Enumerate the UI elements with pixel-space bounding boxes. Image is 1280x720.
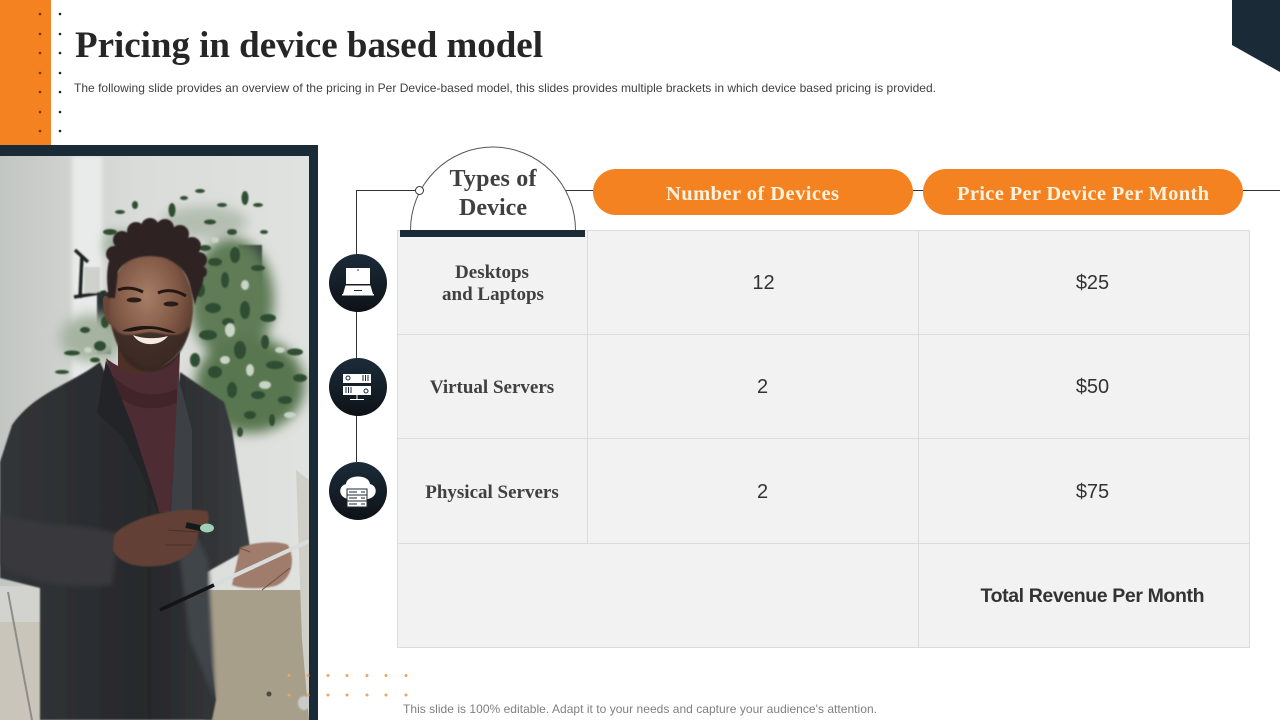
- row: desktops and laptops: 12: [752, 272, 775, 294]
- row: physical servers: [425, 481, 1109, 503]
- header pill: price per device per month: Price Per Device Per Month: [957, 183, 1210, 205]
- row: desktops and laptops: $25: [1076, 272, 1109, 294]
- turtleneck: [106, 352, 180, 512]
- total revenue label: Total Revenue Per Month: [980, 585, 1204, 607]
- plant foliage: [60, 206, 305, 433]
- subtitle description: The following slide provides an overview of the pricing in Per Device-based model, this slides provides multiple brackets in which device based pricing is provided.: [74, 81, 936, 95]
- hair: [106, 218, 207, 305]
- row: physical servers: Physical Servers: [425, 482, 559, 503]
- plant bracket and pot: [74, 245, 262, 354]
- table: [397, 230, 1250, 648]
- title: Pricing in device based model: [75, 25, 543, 66]
- icon: virtual servers: [329, 358, 387, 416]
- footer note: This slide is 100% editable. Adapt it to your needs and capture your audience's attention.: [403, 702, 877, 716]
- row: desktops and laptops: and Laptops: [442, 284, 544, 305]
- header: types of device: Device: [459, 195, 527, 221]
- row: desktops and laptops: [442, 262, 1109, 305]
- header pill: number of devices: Number of Devices: [666, 183, 839, 205]
- header pill: number of devices: [593, 169, 913, 215]
- neck and face: [118, 345, 174, 374]
- row: virtual servers: $50: [1076, 376, 1109, 398]
- row: virtual servers: [430, 376, 1109, 398]
- top right corner shape: [1232, 0, 1280, 72]
- tablet hand: [232, 542, 292, 588]
- icon: cloud server: [329, 462, 387, 520]
- decorative dots top left: [39, 13, 61, 132]
- header: types of device: [400, 147, 585, 237]
- row: desktops and laptops: Desktops: [455, 262, 529, 283]
- row: virtual servers: Virtual Servers: [430, 377, 554, 398]
- row: physical servers: 2: [757, 481, 768, 503]
- connector lines: [356, 190, 1280, 462]
- orange corner block: [0, 0, 51, 145]
- icon: laptop: [329, 254, 387, 312]
- lapels: [97, 360, 160, 518]
- photo: smiling man with tablet: [0, 156, 310, 720]
- row: physical servers: $75: [1076, 481, 1109, 503]
- photo frame: [0, 145, 318, 720]
- decorative dots bottom: [288, 674, 408, 696]
- jacket: [0, 362, 250, 720]
- header: types of device: Types of: [450, 166, 538, 192]
- hand and pen: [113, 510, 209, 566]
- header pill: price per device per month: [923, 169, 1243, 215]
- row: virtual servers: 2: [757, 376, 768, 398]
